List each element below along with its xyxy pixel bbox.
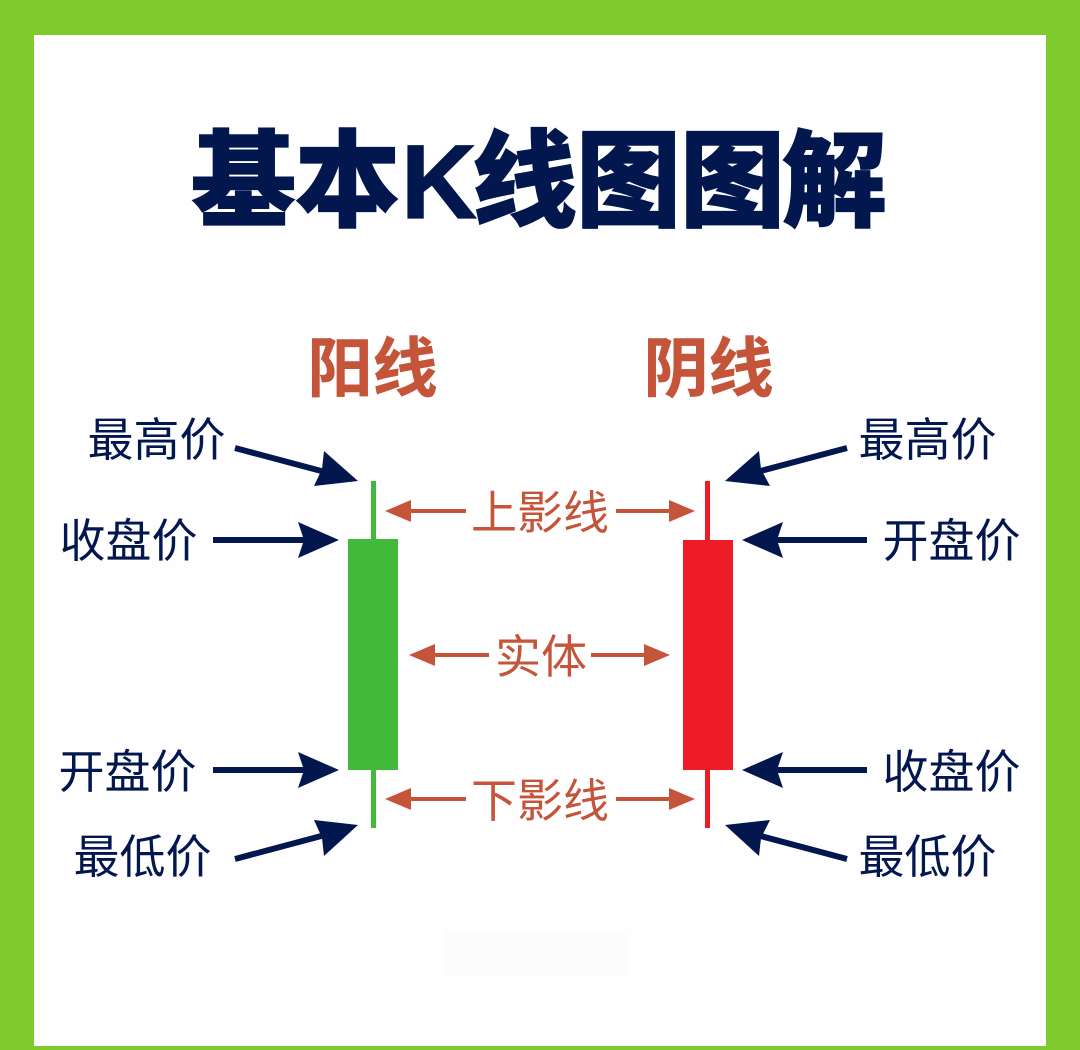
body annotation	[409, 631, 670, 683]
right navy arrows	[725, 448, 867, 859]
left labels: 收盘价	[60, 515, 198, 567]
right labels: 收盘价	[882, 746, 1020, 798]
right labels: 开盘价	[882, 515, 1020, 567]
left navy arrows	[213, 448, 358, 859]
title: 基本K线图图解	[191, 124, 887, 241]
body annotation: 实体	[495, 631, 587, 683]
faint watermark patch	[445, 930, 630, 976]
lower shadow annotation: 下影线	[471, 775, 609, 827]
green candlestick	[348, 481, 398, 828]
red candlestick	[683, 481, 733, 828]
lower shadow annotation	[385, 775, 695, 827]
upper shadow annotation: 上影线	[471, 487, 609, 539]
heading: 阳线: 阳线	[307, 332, 438, 405]
right labels: 最高价	[858, 414, 996, 466]
left labels: 最高价	[88, 414, 226, 466]
left labels	[58, 414, 226, 883]
heading: 阴线: 阴线	[643, 332, 774, 405]
upper shadow annotation	[385, 487, 695, 539]
right labels: 最低价	[858, 831, 996, 883]
left labels: 最低价	[74, 831, 212, 883]
left labels: 开盘价	[58, 746, 196, 798]
right labels	[858, 414, 1020, 883]
